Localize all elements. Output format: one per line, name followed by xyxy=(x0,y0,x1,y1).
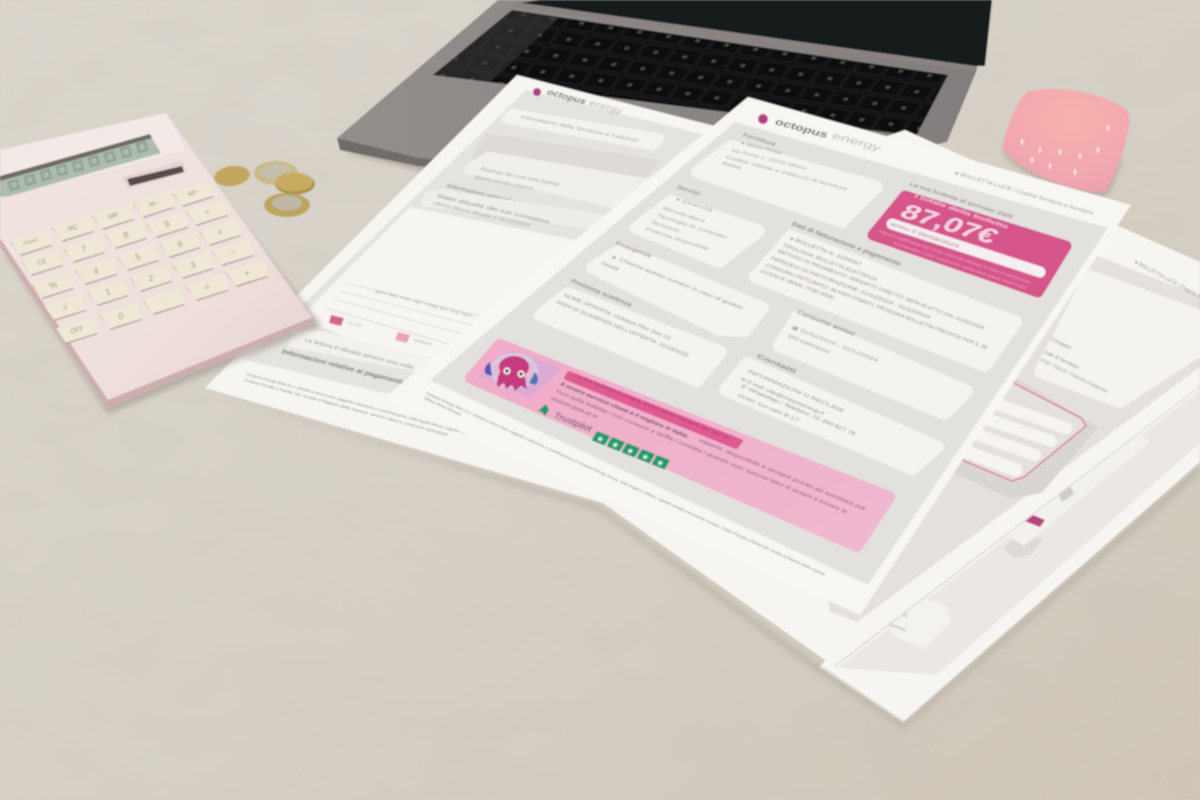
box: consumo annuo: 550 kWh/anno xyxy=(786,334,831,355)
box: dati di fatturazione: CODICE IBAN: IT00 0000 xyxy=(759,269,836,301)
calculator keys: % xyxy=(48,279,58,291)
calculator keys: MC xyxy=(67,224,79,233)
left bill address box: Intestatario della fornitura e indirizzo xyxy=(519,115,640,144)
box: contatti: Orari: lun-ven 9-17 xyxy=(736,393,800,423)
box: servizi: Potenza disponibile xyxy=(644,227,710,252)
main bill logo xyxy=(758,114,883,154)
box: servizi: Mercato libero xyxy=(661,206,707,224)
left bill note: La lettura è rilevata almeno una volta xyxy=(303,338,416,371)
right bill large white box: POD: IT001E / Potenza impegnata xyxy=(1039,358,1109,395)
box: contatti: ✉ E-mail: ciao@octopusenergy.it xyxy=(739,377,826,417)
box: emergenze: ▲ Chiama questo numero in caso di guasto xyxy=(609,254,745,311)
box: dati di fatturazione: ● BOLLETTA N. 1234567 xyxy=(788,236,863,267)
calculator keys: CE xyxy=(36,258,48,267)
calculator keys: 2 xyxy=(147,273,155,283)
calculator keys: MR xyxy=(107,212,119,221)
calculator xyxy=(0,113,322,414)
trustpilot stars xyxy=(591,431,670,470)
box: contatti xyxy=(725,353,938,469)
lowest bill box xyxy=(887,602,946,643)
left bill legend: payment squares xyxy=(329,315,432,346)
total amount callout: entro il 06/08/2025 xyxy=(889,222,961,250)
sheet: lowest bill xyxy=(820,380,1200,722)
right bill grey panel xyxy=(800,255,1200,622)
trustpilot stars: ★ xyxy=(625,446,636,456)
left bill fine print: Octopus Energy Italia S.r.l. società a socio unico soggetta a direzione e coordinamento, sede legale Milano, capitale sociale xyxy=(245,372,475,437)
payment due pill xyxy=(892,224,1040,272)
sheet: right bill xyxy=(603,130,1200,667)
calculator keys: 3 xyxy=(189,260,197,270)
box: fornitura xyxy=(697,133,877,222)
laptop base xyxy=(337,0,992,200)
calculator keys: × xyxy=(216,226,224,238)
banner body text: Vuoi sulla bolletta i tuoi consumi e tariffa / contatta i quando vuoi: saremo felici di aiutarti a trovare la xyxy=(554,389,848,515)
left bill payment heading: Informazioni relative ai pagamenti xyxy=(280,349,404,386)
left bill table box: Materia energia, trasporto xyxy=(473,175,535,192)
box: emergenze xyxy=(592,241,763,331)
lowest bill grey panel xyxy=(837,390,1200,675)
mouse xyxy=(1003,89,1129,195)
banner body text: vabene, disponibile e sempre pronto ad ascoltarti (se xyxy=(697,438,867,512)
calculator keys: 5 xyxy=(134,252,142,262)
calculator keys: √ xyxy=(61,301,69,312)
banner body text: Il nostro servizio clienti è il migliore in Italia: xyxy=(559,382,690,440)
box: dati di fatturazione: TIPOLOGIA: BOLLETTA ELETTRICA xyxy=(781,243,879,283)
main bill header note: ● BOLLETTA LUCE | Codice fornitura e fornitore xyxy=(953,171,1094,216)
left bill consumption chart area xyxy=(300,207,575,378)
sheet: left bill xyxy=(205,75,835,667)
trustpilot stars: ★ xyxy=(655,458,666,468)
octopus mascot icon xyxy=(478,350,562,398)
box: dati di fatturazione: METODO DI PAGAMENTO: ADDEBITO DIRETTO SEPA IN ATTO DAL 01/02/2024 xyxy=(776,249,985,331)
calculator keys: − xyxy=(229,246,237,258)
box: servizi: ● Elettricità xyxy=(674,197,714,213)
right bill header text: ● BOLLETTA LUCE | Pagina 3 xyxy=(1133,260,1200,299)
calculator keys: ON/AC xyxy=(23,237,40,247)
calculator keys: 8 xyxy=(122,230,130,240)
calculator keys: 1 xyxy=(104,287,112,297)
box: contatti: INFORMAZIONI O RECLAMI xyxy=(746,369,845,414)
left bill fine print: Codice Fiscale e Partita IVA, iscritta al Registro delle Imprese, servizio clienti e condizioni contrattuali xyxy=(243,378,448,437)
calculator keys: + xyxy=(243,267,251,279)
lowest bill strip xyxy=(1006,434,1150,556)
left bill info box xyxy=(424,193,606,229)
calculator keys: OFF xyxy=(69,325,85,336)
left bill table box xyxy=(468,133,660,205)
lowest bill box: Servizi xyxy=(892,609,909,619)
paper shadows xyxy=(206,391,1200,730)
calculator keys: 9 xyxy=(163,219,171,229)
box: fornitura: Italia xyxy=(720,161,743,171)
right bill large white box: Contatori xyxy=(1049,337,1072,351)
left bill grey panel xyxy=(245,90,725,400)
calculator keys: M− xyxy=(148,200,160,209)
box: servizi: Servizi xyxy=(675,185,702,197)
box: servizi: Tipologia di contratto xyxy=(655,213,729,241)
left bill logo xyxy=(533,87,625,116)
left bill info box: Ultima lettura rilevata il 31/12/2024 xyxy=(431,201,531,229)
box: dati di fatturazione: CONSUMO FATTURATO: 99 KWH STIMATI, PROSSIMA BOLLETTA PREVISTA PER IL 28 xyxy=(764,263,988,351)
calculator body xyxy=(0,113,315,408)
box: consumo annuo xyxy=(779,309,967,414)
main bill logo: energy xyxy=(829,131,883,154)
box: prossima scadenza: Prossima scadenza xyxy=(569,278,634,308)
box: prossima scadenza: NOME OFFERTA: Octopus Flex Gen 23 xyxy=(562,293,672,341)
main bill fine print: Octopus Energy Italia S.r.l. società a socio unico soggetta a direzione e coordinamento di Octopus Energy Group, sede legale in Milano, capitale sociale interamente versato, Codice Fiscale e Partita IVA, iscritta al Registro delle Imprese xyxy=(425,392,826,577)
calculator keys: M+ xyxy=(187,189,199,198)
total amount callout: Importo addebitato sul conto corrente indicato in fase di attivazione xyxy=(877,229,1033,285)
box: emergenze: Emergenze xyxy=(614,241,654,260)
laptop screen xyxy=(520,0,992,66)
trustpilot stars: ★ xyxy=(595,434,606,444)
calculator keys: 4 xyxy=(92,266,100,276)
left bill note xyxy=(290,332,440,372)
main bill fine print: Milano Monza Brianza xyxy=(423,397,463,417)
trustpilot stars: ★ xyxy=(640,452,651,462)
calculator keys: 6 xyxy=(176,239,184,249)
left bill info box: Stato attuale del tuo contatore xyxy=(435,194,551,225)
total amount callout: Controlla i tuoi consumi nella tua area riservata xyxy=(892,241,1029,290)
left bill table box: Riepilogo dei costi della bolletta xyxy=(479,167,561,188)
lowest bill box: Gennaio xyxy=(887,622,908,634)
left bill logo: octopus xyxy=(545,87,588,106)
calculator keys: 7 xyxy=(80,244,88,254)
calculator keys: ÷ xyxy=(203,206,211,217)
banner headline bar: La tua bolletta è chiara, e noi siamo sempre qui per te xyxy=(573,373,730,441)
box: consumo annuo: Consumo annuo xyxy=(795,309,857,338)
box: dati di fatturazione: PERIODO DI FATTURAZIONE: 01/12/2024 - 31/12/2024 xyxy=(769,256,932,320)
solar strip xyxy=(122,161,187,189)
left bill consumption chart area: gen feb mar apr mag giu lug ago xyxy=(374,289,475,318)
box: servizi: Tensione xyxy=(649,220,681,234)
box: consumo annuo: ▣ 01/01/2024 - 31/12/2024 xyxy=(790,325,879,364)
left bill legend: payment squares: F1 / F2 xyxy=(346,321,363,329)
laptop xyxy=(337,0,992,200)
main bill sheet xyxy=(385,97,1131,615)
box: dati di fatturazione: Dati di fatturazione e pagamento xyxy=(790,221,903,267)
pink customer service banner xyxy=(471,345,889,546)
calculator display xyxy=(0,134,161,197)
total amount callout: La tua bolletta di gennaio 2025 xyxy=(908,182,1014,220)
box: fornitura: Via Roma 1, 20100 Milano xyxy=(729,148,808,171)
banner body text: soluzione giusta per te xyxy=(549,396,599,420)
box: emergenze: Guasti xyxy=(600,261,620,272)
box: fornitura: Codice cliente e indirizzo di fornitura xyxy=(724,155,849,192)
box: dati di fatturazione xyxy=(755,221,1016,366)
box: fornitura: Fornitura xyxy=(741,133,778,148)
main bill logo: octopus xyxy=(772,117,831,141)
banner body text xyxy=(549,382,867,515)
left bill legend: payment squares: Consumi xyxy=(412,338,432,346)
banner headline bar xyxy=(566,373,741,447)
trustpilot logo xyxy=(538,404,595,434)
main bill grey panel xyxy=(430,122,1108,585)
total amount callout: I totale della bolletta xyxy=(913,194,1011,231)
box: fornitura: ● Mario Rossi xyxy=(739,141,783,156)
box: prossima scadenza xyxy=(540,278,721,381)
right bill large white box: Dati di fornitura xyxy=(1043,350,1080,371)
total amount callout xyxy=(873,182,1066,292)
calculator keys: . xyxy=(161,296,167,306)
left bill heading: Informazioni generali sui consumi xyxy=(445,184,551,213)
pink outlined table xyxy=(940,372,1094,496)
total amount callout: 87,07€ xyxy=(895,200,1004,248)
keyboard xyxy=(433,10,948,136)
box: contatti: ✆ WhatsApp / Telefono: 02 380 827 78 xyxy=(739,384,857,437)
left bill logo: energy xyxy=(587,98,625,116)
calculator keys xyxy=(10,181,268,344)
coins xyxy=(213,161,315,217)
calculator keys: = xyxy=(203,281,211,293)
box: contatti: Contatti xyxy=(755,353,798,375)
box: prossima scadenza: DATA DI SCADENZA DELL'OFFERTA: 31/10/2025 xyxy=(555,300,690,359)
left bill address box xyxy=(506,113,660,146)
trustpilot logo: Trustpilot xyxy=(552,410,595,434)
trustpilot stars: ★ xyxy=(610,440,621,450)
box: servizi xyxy=(636,185,759,262)
calculator keys: 0 xyxy=(117,311,125,321)
right bill large white box xyxy=(1039,276,1200,402)
